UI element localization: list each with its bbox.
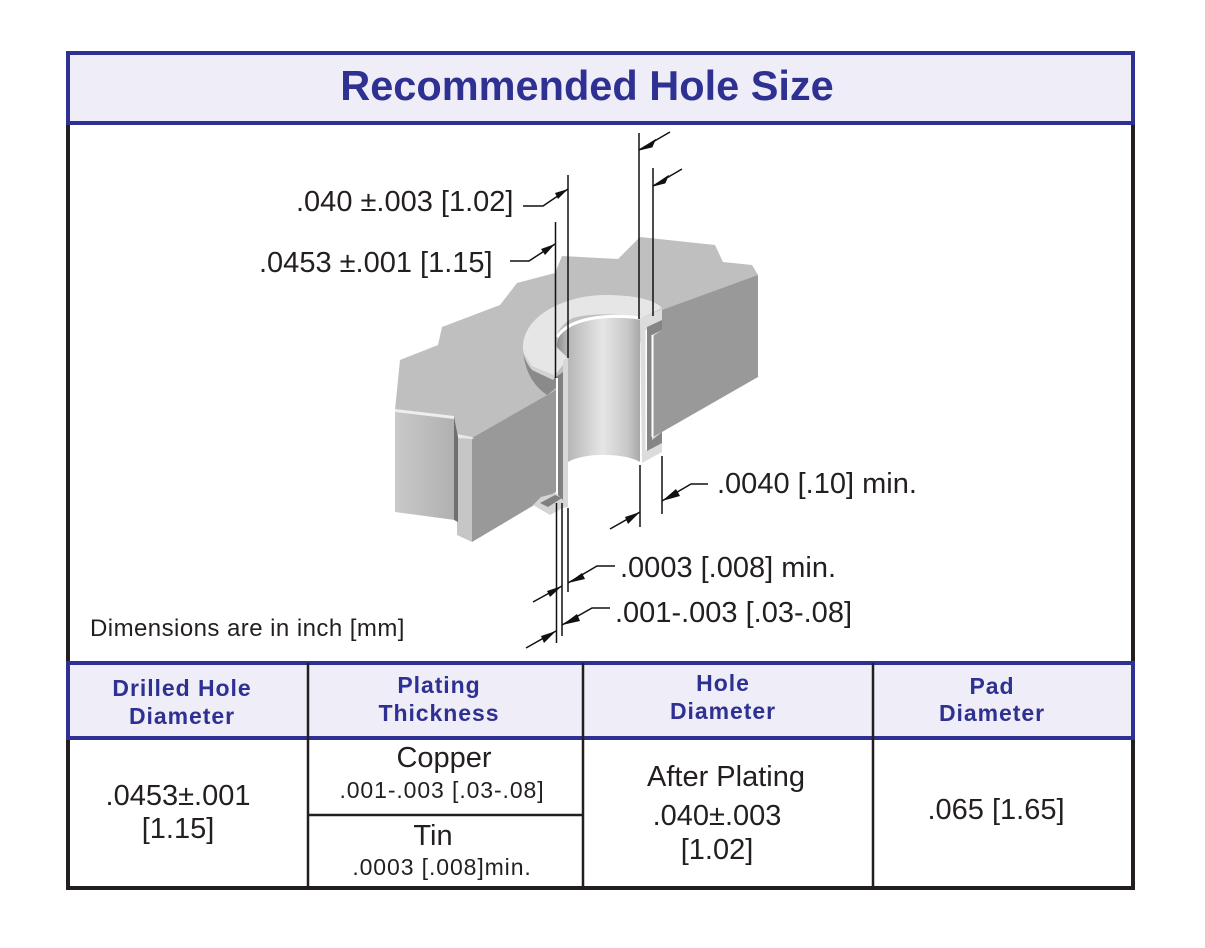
board right face xyxy=(662,275,758,432)
dimension label: .040: .040 ±.003 [1.02] xyxy=(296,186,513,218)
units note: Dimensions are in inch [mm] xyxy=(90,615,405,642)
cell: hole diameter value: [1.02] xyxy=(681,834,753,866)
diagram: plated through-hole board section xyxy=(395,237,758,542)
dimension lines and arrows xyxy=(510,132,708,648)
cell: drilled hole value xyxy=(106,780,250,845)
dimension: top right arrow two xyxy=(653,168,682,316)
frame: outer table border xyxy=(68,53,1133,888)
cell: copper thickness: .001-.003 [.03-.08] xyxy=(339,777,545,803)
header: drilled hole diameter xyxy=(112,675,252,729)
header: hole diameter: Diameter xyxy=(670,698,776,724)
cell: tin thickness: Tin xyxy=(413,820,453,852)
hole bore xyxy=(557,317,640,462)
cell: hole diameter value: After Plating xyxy=(647,761,805,793)
left plating section xyxy=(563,357,568,508)
table grid lines xyxy=(308,663,873,888)
copper pad ring side xyxy=(523,345,556,395)
copper pad ring xyxy=(523,295,662,378)
dimension: .0453 upper left xyxy=(510,222,556,378)
header: plating thickness xyxy=(378,672,500,726)
title band xyxy=(68,53,1133,123)
dimension label: .0453: .0453 ±.001 [1.15] xyxy=(259,247,493,279)
dimension: plating lines below xyxy=(526,503,615,648)
header: plating thickness: Thickness xyxy=(378,700,500,726)
left front block xyxy=(395,410,455,520)
dimension label: .001-.003: .001-.003 [.03-.08] xyxy=(615,597,852,629)
cell: hole diameter value xyxy=(647,761,805,866)
cell: hole diameter value: .040±.003 xyxy=(653,800,781,832)
table header band xyxy=(68,663,1133,738)
dimension: .0040 xyxy=(610,456,708,529)
dimension label: .0040: .0040 [.10] min. xyxy=(717,468,917,500)
header: pad diameter: Diameter xyxy=(939,700,1045,726)
dimension: top right arrow one xyxy=(639,132,670,319)
dimension label: .0003: .0003 [.008] min. xyxy=(620,552,836,584)
cell: drilled hole value: .0453±.001 xyxy=(106,780,250,812)
cell: pad diameter value: .065 [1.65] xyxy=(927,794,1065,826)
header: hole diameter: Hole xyxy=(696,670,750,696)
cell: tin thickness xyxy=(352,820,532,880)
header: drilled hole diameter: Diameter xyxy=(129,703,235,729)
right plating section xyxy=(640,309,662,463)
cell: tin thickness: .0003 [.008]min. xyxy=(352,854,532,880)
header: pad diameter xyxy=(939,673,1045,726)
dimension: .040 upper left xyxy=(523,175,568,358)
title band: Recommended Hole Size xyxy=(340,62,834,109)
cell: copper thickness xyxy=(339,742,545,803)
header: plating thickness: Plating xyxy=(397,672,481,698)
board left face xyxy=(472,390,556,542)
board top surface xyxy=(395,237,758,438)
cell: copper thickness: Copper xyxy=(396,742,492,774)
cell: drilled hole value: [1.15] xyxy=(142,813,214,845)
header: pad diameter: Pad xyxy=(969,673,1015,699)
header: drilled hole diameter: Drilled Hole xyxy=(112,675,252,701)
header: hole diameter xyxy=(670,670,776,724)
